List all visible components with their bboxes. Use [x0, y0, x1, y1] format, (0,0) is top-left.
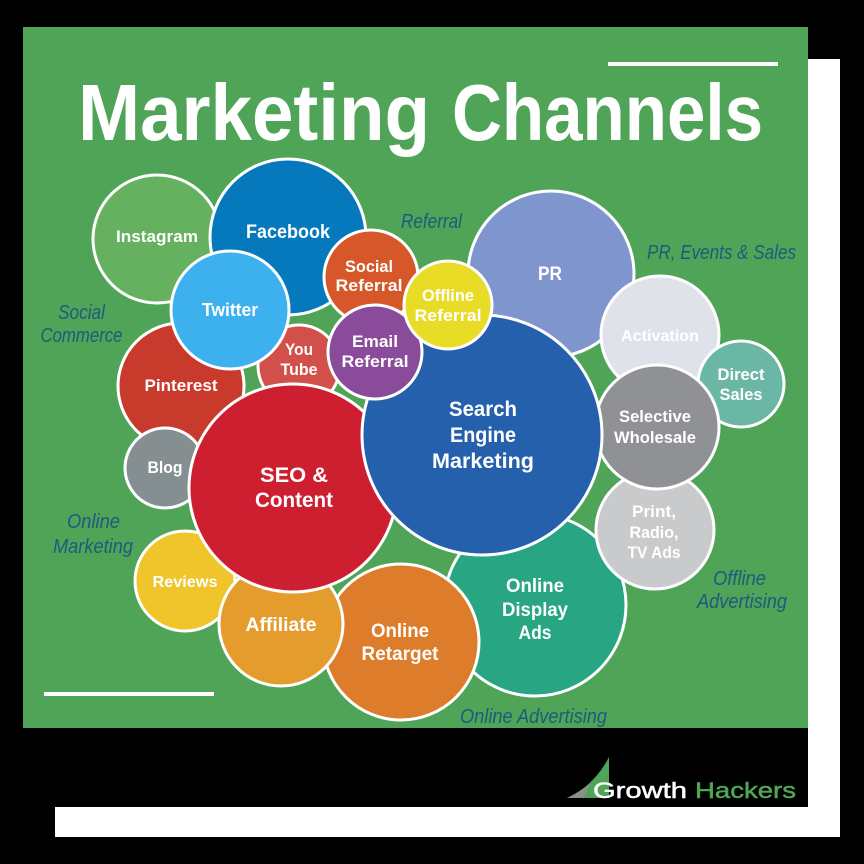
bubble: Affiliate — [219, 562, 343, 686]
logo: Growth Hackers: Hackers — [695, 778, 796, 803]
bubble: Facebook: Facebook — [246, 222, 330, 243]
category label: Social Commerce — [40, 302, 122, 347]
bubble: Online Display Ads: Ads — [518, 623, 552, 644]
bubble: Email Referral — [328, 305, 422, 399]
bubble: Direct Sales: Direct — [718, 365, 765, 384]
bubble: Online Retarget — [323, 564, 479, 720]
green panel — [23, 27, 808, 728]
top accent line — [608, 62, 778, 66]
bubble: Search Engine Marketing — [362, 315, 602, 555]
bubble: Online Retarget: Online — [371, 621, 429, 642]
bubble: Social Referral — [324, 230, 418, 324]
black footer band — [23, 728, 808, 807]
logo: Growth Hackers: Growth — [593, 778, 687, 803]
bubble: Print, Radio, TV Ads — [596, 471, 714, 589]
bubble: Email Referral: Referral — [342, 352, 408, 371]
bubble: PR: PR — [538, 264, 562, 285]
bubble: Search Engine Marketing: Marketing — [432, 450, 534, 473]
title — [78, 68, 763, 157]
category label: Referral: Referral — [401, 211, 462, 233]
bubble: Print, Radio, TV Ads: Radio, — [630, 524, 678, 542]
bubble: Direct Sales — [698, 341, 784, 427]
category label: Online Marketing — [53, 511, 133, 558]
bubble: Online Display Ads: Display — [502, 600, 568, 621]
bubble: Selective Wholesale — [595, 365, 719, 489]
bubble: Email Referral: Email — [352, 332, 398, 351]
bubble: SEO & Content: SEO & — [260, 464, 328, 487]
bubble: Twitter — [171, 251, 289, 369]
bubble: Instagram — [93, 175, 221, 303]
bubble: PR — [468, 191, 634, 357]
title: Marketing — [78, 68, 430, 157]
bubble: SEO & Content — [189, 384, 397, 592]
logo: Growth Hackers — [567, 757, 796, 803]
bubble: YouTube: You — [285, 340, 313, 359]
bottom accent line — [44, 692, 214, 696]
bubble: Offline Referral — [404, 261, 492, 349]
bubble: Activation — [601, 276, 719, 394]
bubble: Affiliate: Affiliate — [246, 615, 316, 636]
bubble: Online Display Ads: Online — [506, 576, 564, 597]
bubble: Reviews: Reviews — [152, 574, 218, 591]
bubble: SEO & Content: Content — [255, 489, 333, 512]
category label: Social Commerce: Commerce — [40, 325, 122, 347]
bubble: Reviews — [135, 531, 235, 631]
bubble: Pinterest — [118, 323, 244, 449]
bubble: Search Engine Marketing: Engine — [450, 424, 516, 447]
bubble: Search Engine Marketing: Search — [449, 398, 517, 421]
category label: Offline Advertising: Advertising — [696, 591, 787, 613]
category label: PR, Events & Sales: PR, Events & Sales — [647, 242, 796, 264]
bubble: Selective Wholesale: Selective — [619, 408, 691, 426]
bubble: Direct Sales: Sales — [720, 385, 762, 404]
bubble: Online Retarget: Retarget — [362, 644, 439, 665]
bubble: YouTube: Tube — [280, 360, 318, 379]
bubble: Pinterest: Pinterest — [144, 376, 218, 395]
bubble: Offline Referral: Referral — [414, 306, 482, 325]
bubble: Print, Radio, TV Ads: Print, — [632, 503, 676, 521]
bubble: YouTube — [258, 325, 340, 407]
bubble: Selective Wholesale: Wholesale — [614, 429, 696, 447]
category label: Offline Advertising — [696, 568, 787, 613]
category label: Online Marketing: Online — [67, 511, 120, 533]
bubble: Social Referral: Referral — [336, 276, 402, 295]
bubble: Social Referral: Social — [345, 257, 393, 276]
category label: Offline Advertising: Offline — [713, 568, 766, 590]
bubble: Online Display Ads — [444, 514, 626, 696]
category label: Social Commerce: Social — [58, 302, 105, 324]
bubble: Print, Radio, TV Ads: TV Ads — [628, 544, 680, 562]
bubble: Offline Referral: Offline — [422, 286, 474, 305]
category label: Online Advertising: Online Advertising — [460, 706, 607, 728]
category label: Online Marketing: Marketing — [53, 536, 133, 558]
bubble: Instagram: Instagram — [116, 228, 198, 246]
bubble: Facebook — [210, 159, 366, 315]
title: Channels — [452, 68, 763, 157]
bubble: Blog: Blog — [148, 458, 182, 477]
bubble: Twitter: Twitter — [202, 300, 258, 320]
bubble: Activation: Activation — [621, 328, 699, 345]
bubble: Blog — [125, 428, 205, 508]
